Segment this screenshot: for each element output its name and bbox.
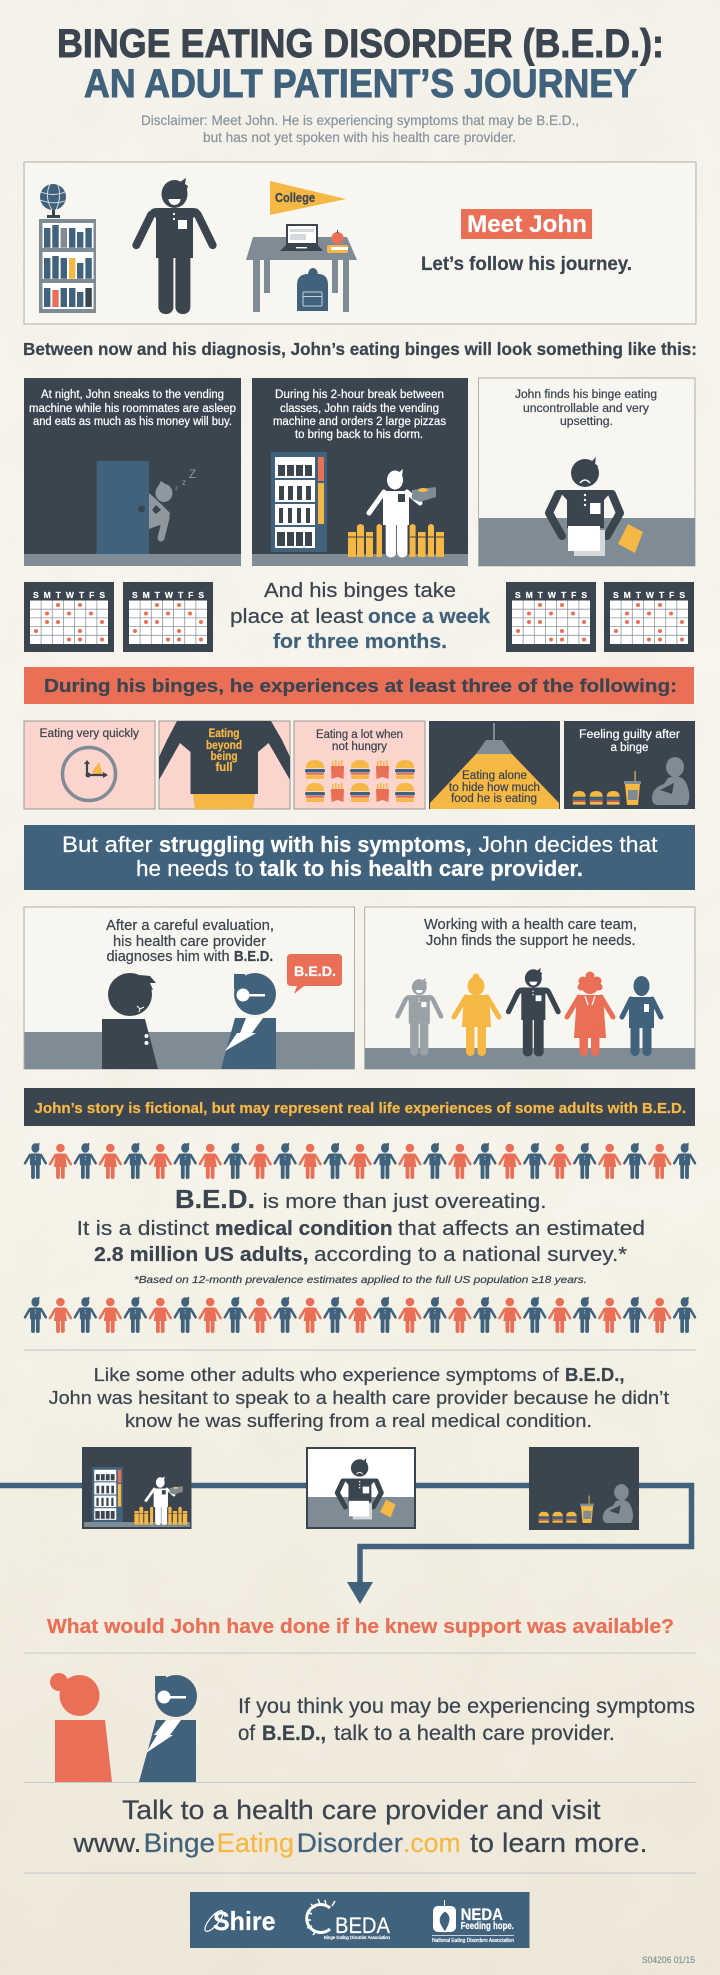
- panel: night vending: [24, 378, 241, 566]
- timeline arrow: [0, 1486, 692, 1604]
- card: eating beyond being full: [159, 721, 290, 809]
- panel: 2-hour break: [252, 378, 468, 566]
- text: frequency: [230, 579, 491, 653]
- card: feeling guilty: Feeling guilty after: [579, 729, 680, 741]
- card: feeling guilty: [564, 721, 695, 809]
- call to action: .com: [403, 1828, 461, 1858]
- logo: Shire: Shire: [213, 1906, 276, 1936]
- logo: NEDA: Feeding hope.: [461, 1920, 514, 1932]
- figures: team: [394, 968, 661, 1056]
- figures: patient and doctor: [50, 1673, 197, 1782]
- banner: decides to talk: talk to his health care provider.: [260, 856, 583, 881]
- disclaimer: Disclaimer: Meet John. He is experiencing symptoms that may be B.E.D.,: [141, 112, 579, 128]
- card: eating when not hungry: Eating a lot when: [316, 729, 403, 741]
- panel: 2-hour break: machine and orders 2 large pizzas: [273, 416, 446, 428]
- text: hesitant: B.E.D.,: [565, 1364, 624, 1385]
- text: talk to provider: [238, 1695, 695, 1745]
- card: feeling guilty: a binge: [610, 742, 648, 754]
- panel: diagnosis: his health care provider: [113, 934, 266, 950]
- text: sleeping zzz: Z: [189, 467, 196, 481]
- card: eating beyond being full: beyond: [206, 738, 242, 752]
- text: sleeping zzz: [175, 467, 196, 492]
- people row bottom: [23, 1296, 697, 1333]
- text: hesitant: John was hesitant to speak to a health care provider because he didn’t: [49, 1387, 669, 1408]
- text: talk to provider: of: [238, 1722, 255, 1745]
- text: B.E.D. statistics: according to a national survey.*: [314, 1244, 627, 1266]
- calendars left: S M T W T F S: [132, 590, 204, 600]
- figure: upset John: [549, 457, 643, 556]
- text: sleeping zzz: z: [182, 478, 186, 487]
- card: eating when not hungry: not hungry: [332, 741, 387, 753]
- figure: doctor: [221, 973, 276, 1069]
- calendars left: S M T W T F S: [33, 590, 105, 600]
- people row top: [23, 1142, 697, 1179]
- banner: decides to talk: he needs to: [136, 856, 254, 881]
- call to action: Talk to a health care provider and visit: [122, 1795, 601, 1825]
- banner: decides to talk: John decides that: [478, 832, 658, 857]
- text: frequency: once a week: [368, 605, 491, 628]
- logo: NEDA: NEDA: [461, 1905, 503, 1924]
- text: frequency: And his binges take: [264, 579, 456, 602]
- panel: night vending: machine while his roommates are asleep: [29, 403, 236, 415]
- icon: college pennant: College: [275, 191, 315, 205]
- card: eating very quickly: [24, 721, 155, 809]
- panel: uncontrollable: uncontrollable and very: [523, 403, 649, 415]
- call to action: Disorder: [297, 1828, 403, 1858]
- vending machine, food and John: [271, 452, 444, 558]
- call to action: Binge: [144, 1828, 215, 1858]
- call to action: [72, 1795, 648, 1858]
- title: [57, 22, 664, 106]
- document code: S04206 01/15: [642, 1955, 695, 1966]
- icon: college pennant: [270, 181, 346, 215]
- banner: at least three symptoms: [24, 667, 694, 704]
- icons: burgers and fries: [305, 760, 415, 802]
- badge: Meet John: Meet John: [467, 211, 587, 238]
- panel: meet John: [24, 162, 696, 324]
- text: frequency: place at least: [230, 605, 363, 628]
- text: B.E.D. statistics: 2.8 million US adults,: [94, 1244, 309, 1266]
- calendars right: S M T W T F S: [515, 590, 587, 600]
- icon: bookshelf: [39, 219, 96, 313]
- icon: door: [96, 461, 149, 554]
- figure: John from behind: [102, 973, 158, 1069]
- card: eating very quickly: Eating very quickly: [40, 728, 139, 740]
- panel: health care team: [365, 907, 695, 1069]
- panel: 2-hour break: classes, John raids the vending: [280, 403, 439, 415]
- timeline thumbnail: upset: [307, 1448, 415, 1528]
- logo: BEDA: BEDA: [335, 1913, 390, 1938]
- panel: diagnosis: B.E.D.: [234, 949, 273, 965]
- text: talk to provider: B.E.D.,: [262, 1722, 326, 1745]
- call to action: Eating: [217, 1828, 294, 1858]
- logos bar: [190, 1892, 530, 1948]
- panel: 2-hour break: to bring back to his dorm.: [295, 429, 423, 441]
- text: frequency: for three months.: [273, 630, 447, 653]
- card: eating when not hungry: [294, 721, 425, 809]
- card: eating alone: food he is eating: [451, 793, 537, 805]
- card: eating beyond being full: full: [216, 760, 232, 774]
- food and sitting figure: [572, 757, 689, 805]
- panel: diagnosis: After a careful evaluation,: [106, 918, 274, 934]
- title: AN ADULT PATIENT’S JOURNEY: [84, 62, 637, 106]
- logo: NEDA: [432, 1900, 514, 1944]
- text: talk to provider: If you think you may be experiencing symptoms: [238, 1695, 695, 1718]
- text: hesitant: Like some other adults who experience symptoms of: [94, 1364, 560, 1385]
- panel: night vending: At night, John sneaks to the vending: [41, 389, 224, 401]
- panel: uncontrollable: upsetting.: [560, 416, 613, 428]
- text: hesitant: know he was suffering from a real medical condition.: [125, 1410, 592, 1431]
- disclaimer: [141, 112, 579, 145]
- panel: uncontrollable: John finds his binge eating: [515, 389, 657, 401]
- footnote: *Based on 12-month prevalence estimates applied to the full US population ≥18 years.: [134, 1274, 587, 1286]
- banner: fictional story: B.E.D.: [642, 1101, 686, 1117]
- title: BINGE EATING DISORDER (B.E.D.):: [57, 22, 664, 66]
- figure: John: [131, 178, 218, 314]
- text: B.E.D. statistics: B.E.D.: [175, 1184, 255, 1214]
- text: B.E.D. statistics: is more than just overeating.: [263, 1191, 546, 1213]
- panel: health care team: Working with a health care team,: [424, 917, 637, 933]
- card: eating alone: to hide how much: [449, 782, 540, 794]
- banner: at least three symptoms: During his binges, he experiences at least three of the following:: [44, 676, 677, 696]
- banner: decides to talk: But after: [62, 832, 152, 857]
- calendars right: [506, 582, 694, 652]
- text: B.E.D. statistics: medical condition: [215, 1218, 393, 1240]
- icon: clock: [62, 748, 116, 800]
- heading: binges: Between now and his diagnosis, John’s eating binges will look something like this:: [23, 339, 697, 359]
- panel: diagnosis: [24, 907, 354, 1069]
- card: eating alone: [429, 721, 560, 809]
- icon: desk with laptop and backpack: [246, 224, 357, 312]
- figure: John peeking: [149, 481, 172, 538]
- banner: fictional story: John’s story is fictional, but may represent real life experiences of some adults with: [34, 1101, 638, 1117]
- logo: BEDA: [306, 1899, 390, 1940]
- logo: NEDA: National Eating Disorders Association: [432, 1938, 514, 1944]
- panel: diagnosis: diagnoses him with: [106, 949, 230, 965]
- card: eating beyond being full: being: [210, 749, 238, 763]
- banner: decides to talk: [24, 825, 695, 890]
- text: follow his journey: Let’s follow his journey.: [421, 253, 632, 275]
- call to action: to learn more.: [470, 1828, 648, 1858]
- card: eating alone: Eating alone: [462, 770, 527, 782]
- text: talk to provider: talk to a health care provider.: [334, 1722, 615, 1745]
- panel: 2-hour break: During his 2-hour break between: [275, 389, 444, 401]
- text: B.E.D. statistics: [77, 1184, 645, 1266]
- text: B.E.D. statistics: that affects an estimated: [398, 1218, 645, 1240]
- text: sleeping zzz: z: [175, 486, 178, 492]
- panel: uncontrollable: [478, 378, 695, 566]
- speech bubble: [287, 954, 342, 994]
- icon: globe: [40, 184, 66, 218]
- text: hesitant: [49, 1364, 669, 1431]
- banner: decides to talk: struggling with his symptoms,: [159, 832, 472, 857]
- card: eating beyond being full: Eating: [208, 726, 240, 740]
- text: B.E.D. statistics: It is a distinct: [77, 1218, 209, 1240]
- calendars right: S M T W T F S: [613, 590, 685, 600]
- calendars left: [24, 582, 213, 652]
- banner: fictional story: [24, 1088, 695, 1126]
- disclaimer: but has not yet spoken with his health care provider.: [203, 129, 516, 145]
- timeline thumbnail: vending: [82, 1447, 192, 1529]
- panel: night vending: and eats as much as his money will buy.: [33, 416, 232, 428]
- panel: health care team: John finds the support he needs.: [426, 933, 636, 949]
- logo: BEDA: Binge Eating Disorder Association: [324, 1935, 390, 1940]
- timeline thumbnail: guilt: [529, 1447, 639, 1530]
- speech bubble: B.E.D.: [294, 963, 336, 979]
- question: What would John have done if he knew support was available?: [47, 1615, 674, 1638]
- call to action: www.: [72, 1828, 141, 1858]
